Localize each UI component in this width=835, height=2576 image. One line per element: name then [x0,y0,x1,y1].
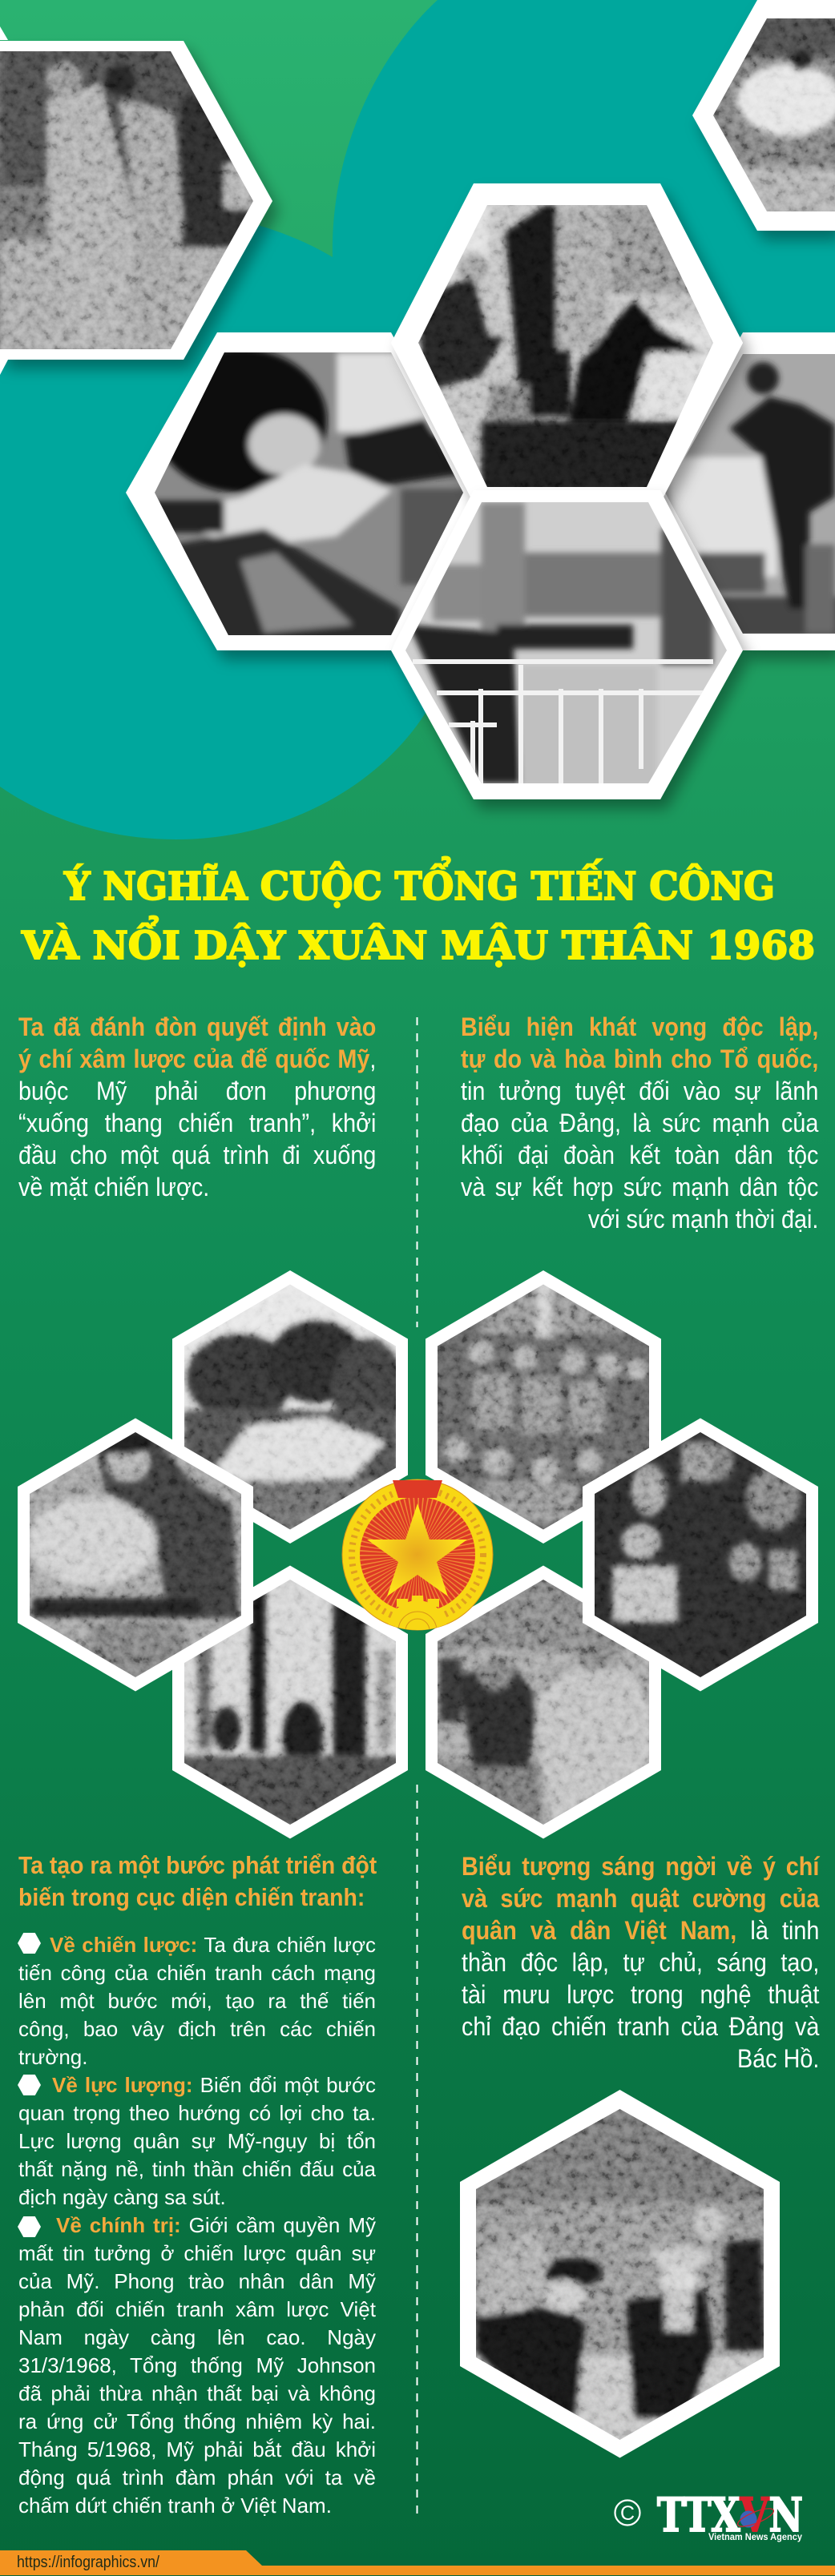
logo: copyright and TTXVN: C [620,2502,635,2525]
text block: top right column: Biểu hiện khát vọng độc lập, [461,1012,818,1041]
text block: lower left body with bullets: tiến công của chiến tranh cách mạng [18,1961,376,1985]
text block: lower left body with bullets: Nam ngày càng lên cao. Ngày [18,2324,376,2349]
title: VÀ NỔI DẬY XUÂN MẬU THÂN 1968 [21,915,815,968]
text block: lower left body with bullets: địch ngày càng sa sút. [18,2185,226,2209]
hexagon photo: gunners behind fence [391,490,743,799]
text block: top right column: với sức mạnh thời đại. [588,1205,818,1234]
text block: lower left body with bullets: phản đối chiến tranh xâm lược Việt [18,2297,376,2321]
hexagon photo: girl aiming rifle [126,332,479,650]
text block: lower left heading: Ta tạo ra một bước phát triển đột [18,1851,377,1879]
centre dashed divider [417,1017,418,2521]
icon: hexagon bullet 1 [18,1933,41,1954]
text block: lower left body with bullets: trường. [18,2044,87,2068]
footer band with link: https://infographics.vn/ [17,2554,159,2571]
text block: lower left heading: biến trong cục diện chiến tranh: [18,1883,365,1911]
text block: top right column: tin tưởng tuyệt đối vào sự lãnh [461,1077,818,1105]
text block: lower left body with bullets: 31/3/1968, Tổng thống Mỹ Johnson [18,2353,376,2377]
hexagon photo: soldier firing in smoke [18,1418,253,1692]
text block: lower left body with bullets: công, bao vây địch trên các chiến [18,2017,376,2041]
text block: lower right column: Bác Hồ. [737,2044,819,2073]
hexagon photo: burning helicopter [172,1270,408,1544]
text block: top left column: “xuống thang chiến tranh”, khởi [18,1109,376,1137]
text block: lower left body with bullets: chấm dứt chiến tranh ở Việt Nam. [18,2493,332,2517]
text block: top left column: ý chí xâm lược của đế quốc Mỹ, [18,1044,376,1073]
logo: copyright and TTXVN: TTXVN [657,2488,803,2542]
text block: lower right column: thần độc lập, tự chủ, sáng tạo, [462,1948,819,1977]
hexagon photo: group of fighters in dark [583,1418,818,1692]
icon: hexagon bullet 2 [18,2075,41,2095]
hexagon photo: wading soldiers [426,1565,661,1839]
text block: lower left body with bullets: Về lực lượng: Biến đổi một bước [52,2073,376,2097]
text block: lower left body with bullets: đã phải thừa nhận thất bại và không [18,2381,376,2405]
title [21,855,815,968]
hexagon photo: women carrying crates through water [460,2090,780,2457]
text block: lower left body with bullets: Lực lượng quân sự Mỹ-ngụy bị tổn [18,2129,376,2153]
text block: top left column: về mặt chiến lược. [18,1173,209,1201]
text block: lower left body with bullets: mất tin tưởng ở chiến lược quân sự [18,2241,376,2265]
logo: copyright and TTXVN: Vietnam News Agency [708,2531,802,2542]
hexagon photo: two men in forest [0,26,272,375]
hexagon photo: marching soldiers [426,1270,661,1544]
text block: top left column: buộc Mỹ phải đơn phương [18,1077,376,1105]
text block: lower left body with bullets: của Mỹ. Phong trào nhân dân Mỹ [18,2268,376,2292]
text block: lower left body with bullets: quan trọng theo hướng có lợi cho ta. [18,2100,376,2124]
text block: top right column: tự do và hòa bình cho Tổ quốc, [461,1044,818,1073]
text block: top left column [18,1012,376,1201]
text block: lower right column [462,1852,821,2073]
text block: top left column: đầu cho một quá trình đi xuống [18,1141,376,1169]
hexagon photo: soldier on tower [652,332,835,650]
hexagon photo: smoke explosion top right [692,0,835,231]
text block: top right column: và sự kết hợp sức mạnh dân tộc [461,1173,818,1201]
text block: top right column: khối đại đoàn kết toàn dân tộc [461,1141,818,1169]
text block: top right column [461,1012,819,1234]
text block: lower left body with bullets: động quá trình đàm phán với ta về [18,2465,376,2489]
text block: top left column: Ta đã đánh đòn quyết định vào [18,1012,376,1041]
text block: top right column: đạo của Đảng, là sức mạnh của [461,1109,818,1137]
text block: lower left body with bullets: lên một bước mới, tạo ra thế tiến [18,1988,376,2012]
text block: lower left heading [18,1851,377,1911]
icon: hexagon bullet 3 [18,2216,41,2237]
text block: lower right column: và sức mạnh quật cường của [462,1884,819,1913]
text block: lower right column: chỉ đạo chiến tranh của Đảng và [462,2012,819,2041]
title: Ý NGHĨA CUỘC TỔNG TIẾN CÔNG [63,855,775,909]
text block: lower left body with bullets: Về chiến lược: Ta đưa chiến lược [50,1932,376,1956]
text block: lower right column: quân và dân Việt Nam, là tinh [462,1916,819,1945]
footer band with link [0,2550,835,2575]
hexagon photo: forest soldiers [172,1565,408,1839]
text block: lower left body with bullets: thất nặng nề, tinh thần chiến đấu của [18,2156,376,2180]
teal background shape [0,0,835,839]
emblem: gold wreath with red sunburst and star [341,1479,494,1631]
text block: lower left body with bullets: Về chính trị: Giới cầm quyền Mỹ [56,2212,376,2236]
text block: lower right column: tài mưu lược trong nghệ thuật [462,1980,819,2009]
text block: lower left body with bullets: Tháng 5/1968, Mỹ phải bắt đầu khởi [18,2437,376,2461]
text block: lower right column: Biểu tượng sáng ngời về ý chí [462,1852,819,1881]
text block: lower left body with bullets [18,1932,376,2517]
hexagon photo: two soldiers behind brick wall [391,183,743,503]
text block: lower left body with bullets: ra ứng cử Tổng thống nhiệm kỳ hai. [18,2409,376,2433]
